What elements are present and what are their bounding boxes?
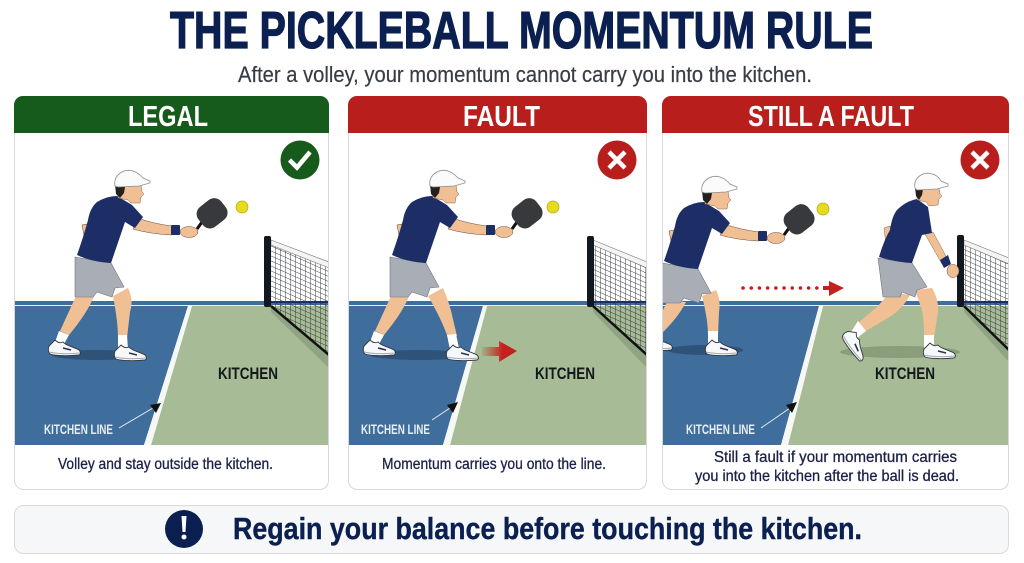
net <box>587 236 647 355</box>
ball <box>817 203 829 215</box>
bottom callout <box>14 506 1008 554</box>
player: volleying outside the kitchen <box>48 170 231 361</box>
panel: legal <box>14 96 329 490</box>
panel: still a fault <box>640 96 1009 490</box>
momentum arrow <box>482 341 517 362</box>
caption: still a fault: you into the kitchen after the ball is dead. <box>695 468 959 485</box>
kitchen line label and arrow: KITCHEN LINE <box>686 421 755 437</box>
panel: fault <box>348 96 647 490</box>
panel header: legal: LEGAL <box>128 101 208 133</box>
icon: exclamation <box>165 510 203 548</box>
caption: still a fault: Still a fault if your momentum carries <box>714 449 957 466</box>
ball <box>236 201 248 213</box>
check icon <box>280 140 320 180</box>
kitchen line label and arrow <box>361 402 458 437</box>
subtitle: After a volley, your momentum cannot carry you into the kitchen. <box>238 62 812 87</box>
kitchen label: KITCHEN <box>875 364 935 383</box>
panel header: still a fault <box>662 96 1009 133</box>
dotted momentum arrow <box>743 281 844 296</box>
panel header: fault <box>348 96 647 133</box>
ball <box>547 201 559 213</box>
panel header: still a fault: STILL A FAULT <box>748 101 914 133</box>
kitchen line label and arrow <box>44 403 161 437</box>
kitchen line label and arrow: KITCHEN LINE <box>361 421 430 437</box>
caption: fault: Momentum carries you onto the line. <box>382 456 606 473</box>
kitchen label: KITCHEN <box>535 364 595 383</box>
net <box>264 236 329 355</box>
cross icon <box>960 140 1000 180</box>
player: carried into the kitchen <box>840 173 959 362</box>
cross icon <box>598 140 636 180</box>
player: stepping onto the line <box>363 170 546 361</box>
callout text: Regain your balance before touching the kitchen. <box>233 511 862 546</box>
kitchen line label and arrow: KITCHEN LINE <box>44 421 113 437</box>
panel header: legal <box>14 96 329 133</box>
kitchen label: KITCHEN <box>218 364 278 383</box>
court scene: still a fault <box>640 140 1009 445</box>
court scene: legal <box>14 140 329 445</box>
caption: legal: Volley and stay outside the kitchen. <box>58 456 273 473</box>
caption: still a fault <box>695 449 959 485</box>
court scene: fault <box>348 140 647 445</box>
kitchen line label and arrow <box>686 402 797 437</box>
net <box>957 235 1009 350</box>
panel header: fault: FAULT <box>463 101 540 133</box>
player: volleying before the kitchen <box>663 176 815 356</box>
